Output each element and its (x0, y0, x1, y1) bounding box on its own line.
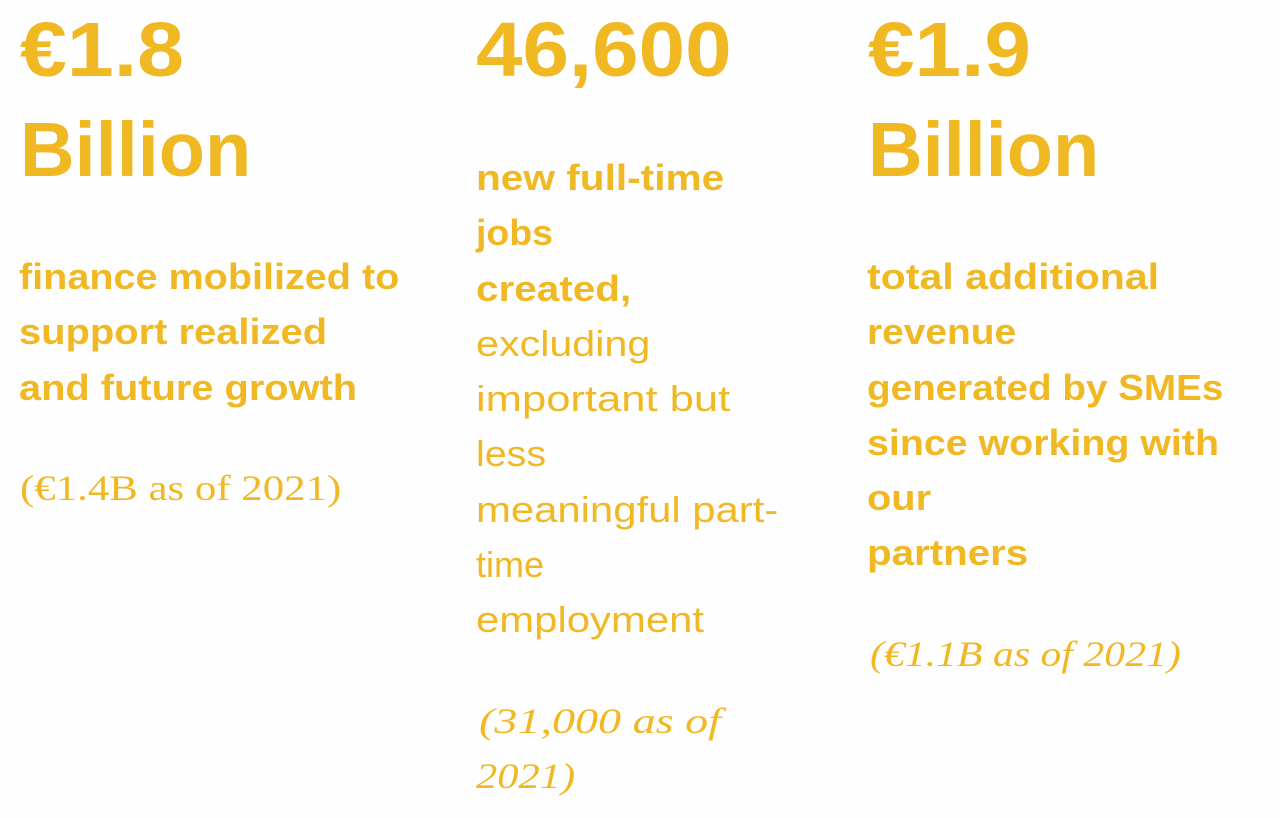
column: additional revenue (867, 7, 1223, 674)
text: 2021 comparison: (€1.1B as of 2021) (870, 634, 1181, 674)
text: revenue description: revenue (867, 311, 1016, 352)
text: jobs description: created, (476, 268, 631, 308)
text: 2021 comparison: 2021) (476, 756, 575, 796)
column: finance mobilized (19, 7, 399, 508)
heading: €1.8 Billion: €1.8 (20, 7, 184, 93)
text: jobs description: time (476, 544, 544, 585)
text: jobs description: less (476, 433, 546, 474)
text: finance mobilized description: finance mobilized to (19, 256, 399, 297)
text: jobs description: meaningful part- (476, 488, 778, 530)
text: jobs description (475, 157, 778, 640)
text: jobs description: new full-time (476, 157, 724, 198)
heading: 46,600: 46,600 (476, 7, 732, 93)
text: revenue description: since working with (867, 422, 1219, 463)
heading: €1.8 Billion: Billion (20, 107, 251, 193)
text: revenue description: our (867, 477, 931, 518)
text: revenue description: total additional (867, 256, 1159, 297)
heading: €1.9 Billion (868, 7, 1099, 193)
text: finance mobilized description: support realized (19, 311, 327, 352)
text: jobs description: employment (476, 599, 704, 640)
heading: €1.8 Billion (20, 7, 251, 193)
text: 2021 comparison: (31,000 as of (479, 701, 721, 741)
heading: €1.9 Billion: €1.9 (868, 7, 1031, 93)
text: 2021 comparison (476, 701, 726, 796)
text: jobs description: excluding (476, 323, 650, 364)
column: jobs created (475, 7, 778, 796)
text: jobs description: jobs (476, 212, 553, 253)
text: jobs description: important but (476, 378, 730, 419)
text: finance mobilized description: and future growth (19, 366, 357, 408)
text: revenue description: partners (867, 532, 1028, 573)
text: 2021 comparison: (€1.4B as of 2021) (20, 468, 341, 508)
heading: €1.9 Billion: Billion (868, 107, 1099, 193)
text: revenue description (867, 256, 1223, 573)
text: finance mobilized description (19, 256, 399, 408)
text: revenue description: generated by SMEs (867, 366, 1223, 408)
